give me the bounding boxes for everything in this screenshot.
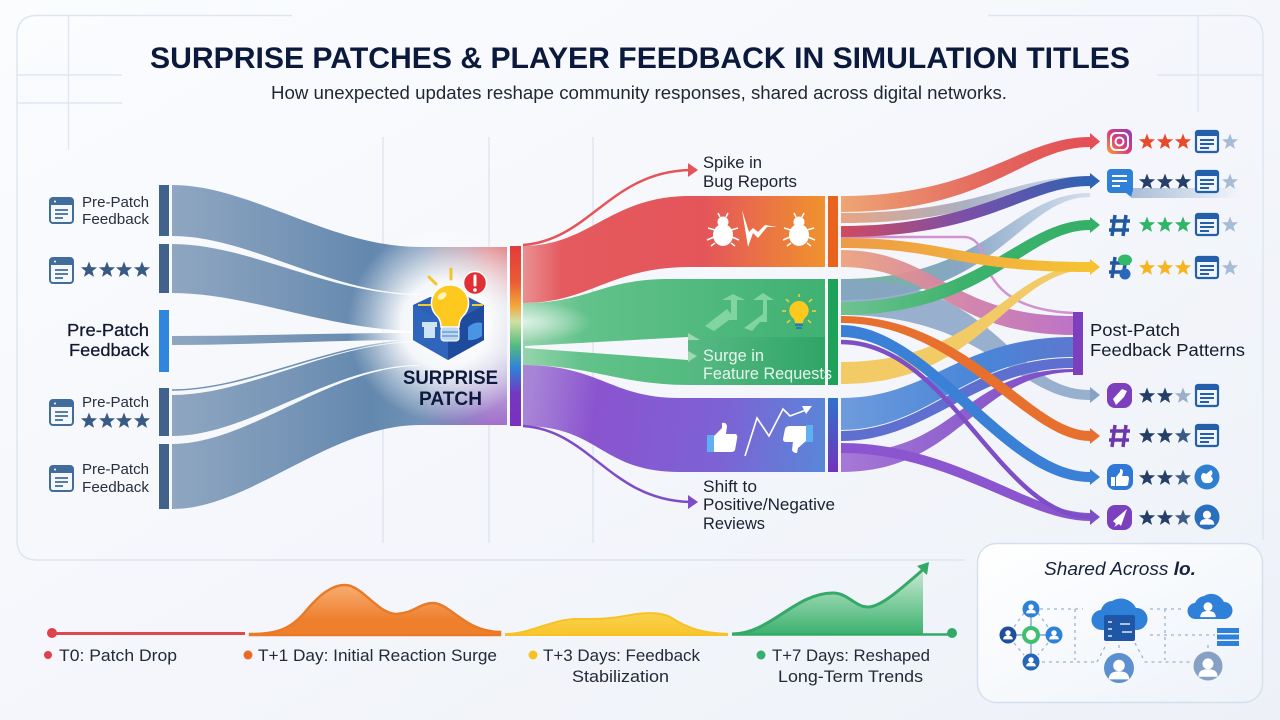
icon: right server [1217,628,1239,646]
timeline label: T+7 [756,646,930,686]
surprise patch label: PATCH [419,389,482,410]
timeline label: T+1: T+1 Day: Initial Reaction Surge [258,646,497,665]
timeline segment: T0 [47,628,245,638]
ribbon: orange to yellow [841,238,1090,272]
ribbon: red [841,137,1090,212]
reviews label: Shift to [703,478,757,496]
input row 4: Pre-Patch [82,394,149,411]
ribbon: crimson to blue [841,176,1090,237]
panel: reviews band [523,365,838,533]
title: SURPRISE PATCHES & PLAYER FEEDBACK IN SIMULATION TITLES [150,42,1130,75]
row: chat [1107,169,1241,198]
post-patch bar and label: Post-Patch [1090,320,1180,340]
icon: idea bulb [782,294,816,328]
icon: rising arrows [705,293,774,331]
input row 5: Feedback [82,479,150,496]
panel: shared across [978,544,1262,702]
input row 3 highlighted: Pre-Patch [67,320,149,340]
input row 1: Pre-Patch [82,194,149,211]
input row 3 highlighted [67,320,149,360]
timeline label: T0: T0: Patch Drop [59,646,177,665]
icon: central cloud and server [1091,599,1148,641]
input row 1: Feedback [82,211,150,228]
row: instagram [1107,129,1238,154]
ribbon: blue to thumb row [841,325,1090,482]
colour blend into rainbow bar [419,247,507,425]
timeline label: T+3 [528,646,700,686]
ribbon: green [841,220,1090,315]
shared heading: Shared Across lo. [1044,558,1196,579]
ribbon: muted blue to review row [841,279,1090,400]
post-patch bar and label: Feedback Patterns [1090,340,1245,360]
panel: feature requests band [523,279,838,385]
ribbon: thin purple [841,342,1090,517]
input row 3 highlighted: Feedback [69,340,149,360]
icon: node cluster [1000,600,1062,670]
input row 5: Pre-Patch [82,461,149,478]
panel: outgoing ribbons [841,133,1100,525]
flows into surprise patch [172,185,507,509]
ribbon: yellow from feature band [841,265,1090,384]
arrowheads [1090,133,1100,525]
ribbon: purple to post-patch [841,369,1073,472]
post-patch bar and label [1073,312,1245,375]
panel: timeline [44,562,957,686]
timeline segment: T+1 [250,585,500,635]
ribbon: indigo [841,358,1073,441]
bug reports label: Spike in [703,154,762,172]
surprise patch label [403,368,498,410]
timeline segment: T+7 [732,562,957,638]
input row 1 [50,194,150,228]
row: ticket [1107,383,1218,408]
main panel frame [17,16,1263,560]
reviews label: Positive/Negative [703,496,835,514]
ribbon: blue main [841,337,1073,430]
icon: central person [1104,653,1134,683]
row: thumbs up [1107,464,1220,490]
icon: surprise patch box with bulb [413,269,486,360]
bug reports label: Bug Reports [703,173,797,191]
row: purple hashtag [1109,425,1218,447]
ribbon: thin pink strand [841,237,1073,313]
surge label box: Feature Requests [703,365,832,383]
icon: right person [1194,652,1222,680]
row: hashtag [1109,214,1238,236]
ribbon: purple to bottom row [841,443,1090,521]
timeline label: T+7: T+7 Days: Reshaped [772,646,930,665]
ribbon: muted blue from bug band [841,176,1090,223]
input bars [159,185,169,509]
ribbon: muted blue from feature band [841,193,1090,300]
timeline label: T+3: Stabilization [572,667,669,686]
input row 4 [50,394,150,428]
row: rocket [1107,504,1220,530]
input row 2 [50,258,150,283]
ribbon: pink to post-patch [841,250,1073,335]
dotted connectors [1014,609,1215,662]
surge label box: Surge in [703,347,764,365]
input row 5 [50,461,150,496]
subtitle: How unexpected updates reshape community responses, shared across digital networks. [271,83,1007,103]
timeline label: T+7: Long-Term Trends [778,667,923,686]
panel: pre-patch inputs [50,185,169,509]
surprise patch label: SURPRISE [403,368,498,389]
reviews label: Reviews [703,515,765,533]
reviews label [703,478,835,533]
bug reports label [703,154,797,191]
patch glow [345,225,507,425]
timeline segment: T+3 [506,613,727,635]
timeline label: T+3: T+3 Days: Feedback [543,646,700,665]
rainbow bar [510,246,521,426]
icon: bugs and spike [707,210,815,247]
panel: outcome rows [1107,129,1241,530]
icon: right cloud [1188,594,1232,619]
icon: thumbs and trend [707,406,813,456]
callout arrow: reviews [523,426,698,509]
panel: bug reports band [523,154,838,303]
row: hashtag with bubble [1109,254,1238,280]
surge label box [688,333,832,385]
ribbon: orange to hash row [841,316,1090,441]
callout arrow: bug reports [523,163,698,245]
